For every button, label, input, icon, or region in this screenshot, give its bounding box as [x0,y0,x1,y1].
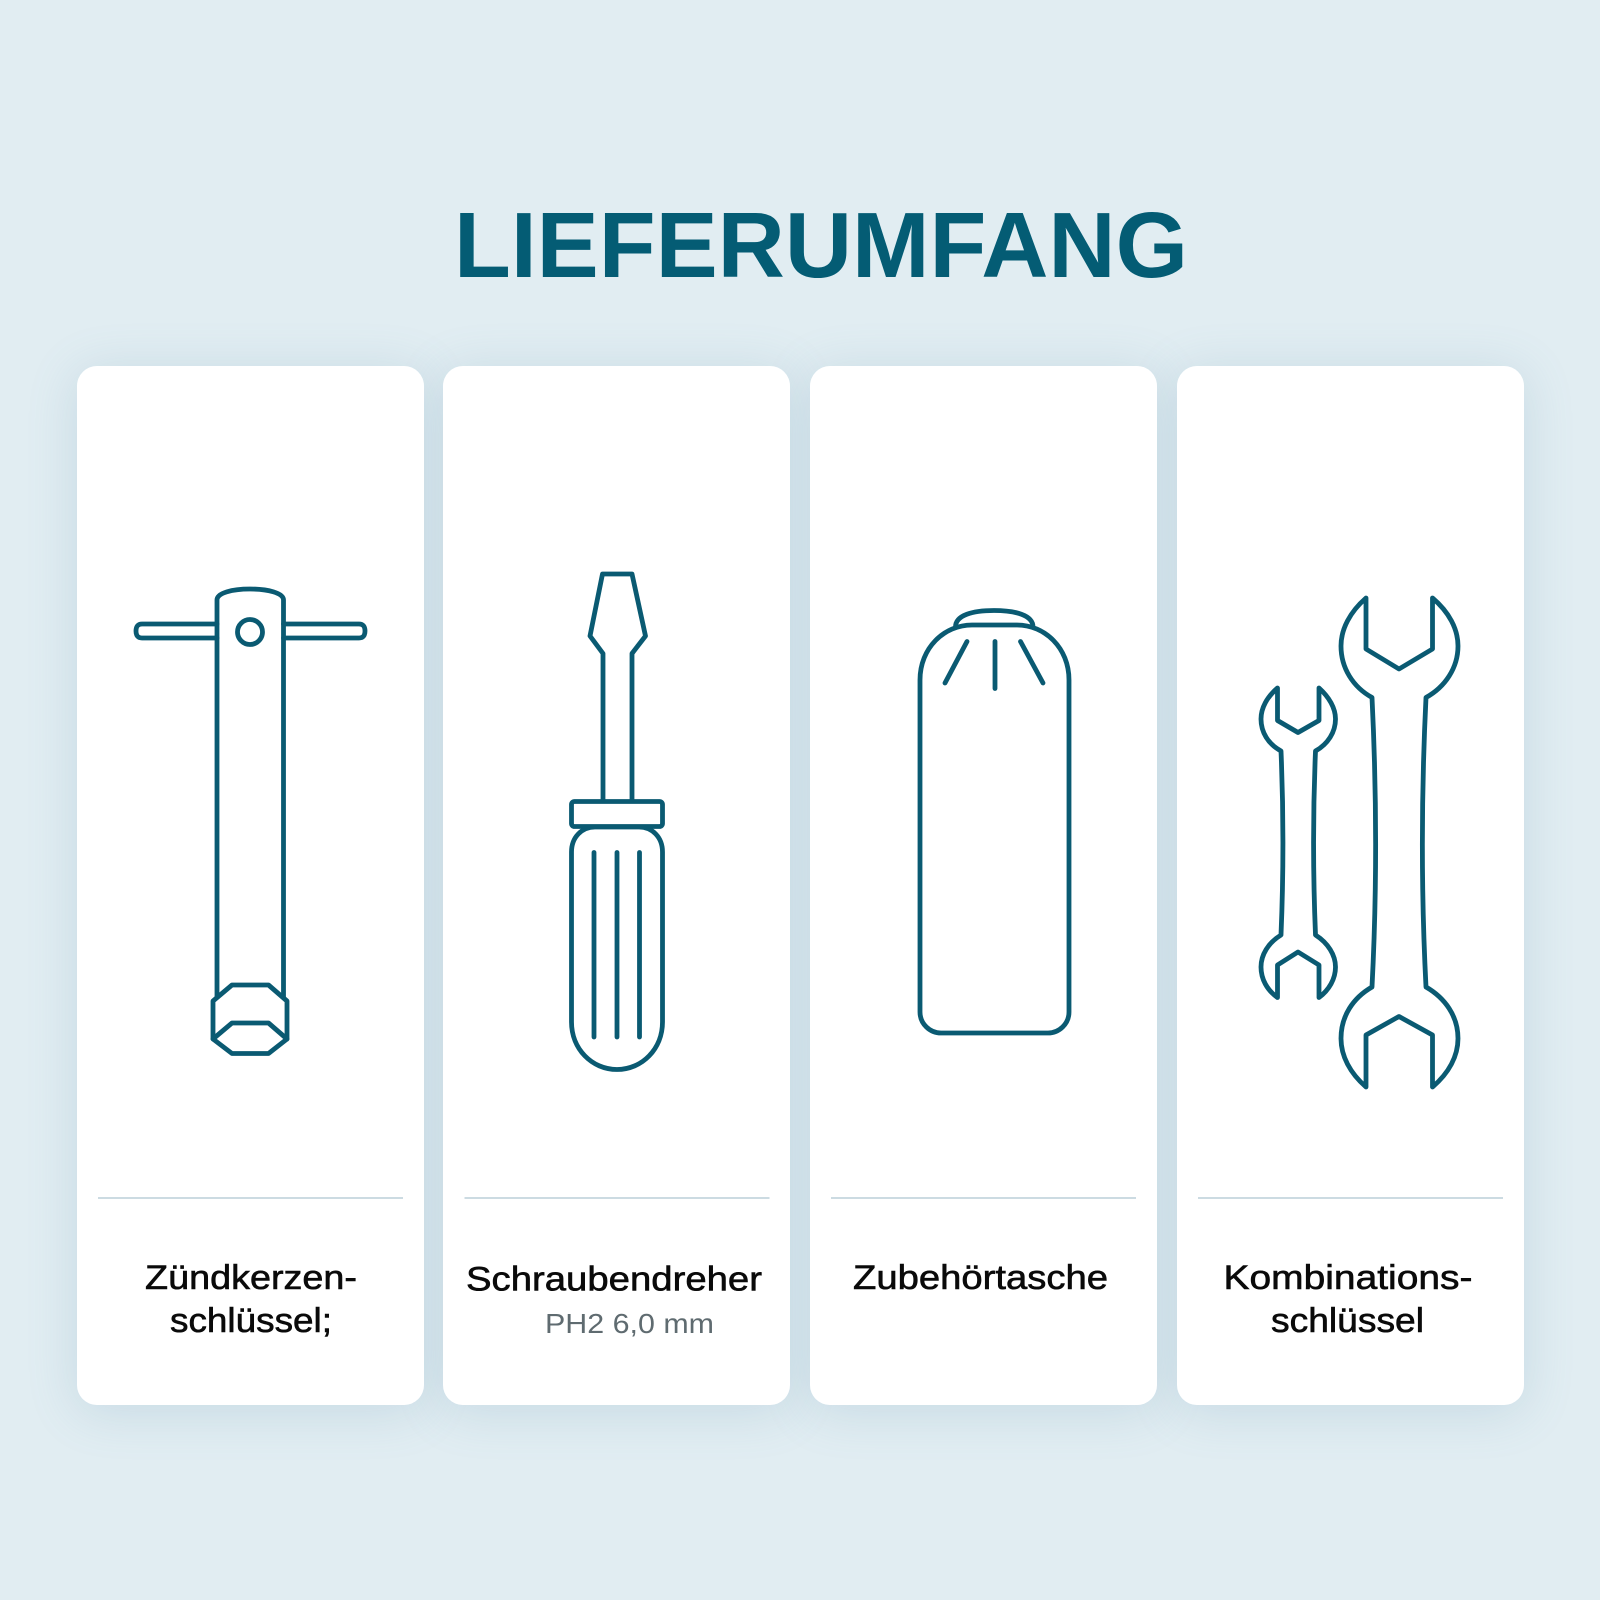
icon: screwdriver [572,574,662,1070]
icon: spark plug wrench [136,589,365,1054]
label: Kombinationsschlüssel: Kombinations- [1224,1259,1472,1297]
panel: Kombinationsschlüssel [1177,366,1524,1405]
icon: accessory bag [920,610,1069,1033]
label: Schraubendreher: Schraubendreher [466,1260,762,1298]
label: Kombinationsschlüssel: schlüssel [1271,1302,1424,1340]
label: Zündkerzenschlüssel: schlüssel; [170,1302,332,1340]
title: LIEFERUMFANG [454,193,1188,297]
label: Zündkerzenschlüssel: Zündkerzen- [145,1259,357,1297]
label: Zubehörtasche: Zubehörtasche [853,1259,1108,1297]
panel: Zündkerzenschlüssel [77,366,424,1405]
panel: Schraubendreher [443,366,790,1405]
panel: Zubehörtasche [810,366,1157,1405]
icon: combination wrenches [1261,598,1458,1087]
label: PH2 6,0 mm: PH2 6,0 mm [545,1308,714,1339]
